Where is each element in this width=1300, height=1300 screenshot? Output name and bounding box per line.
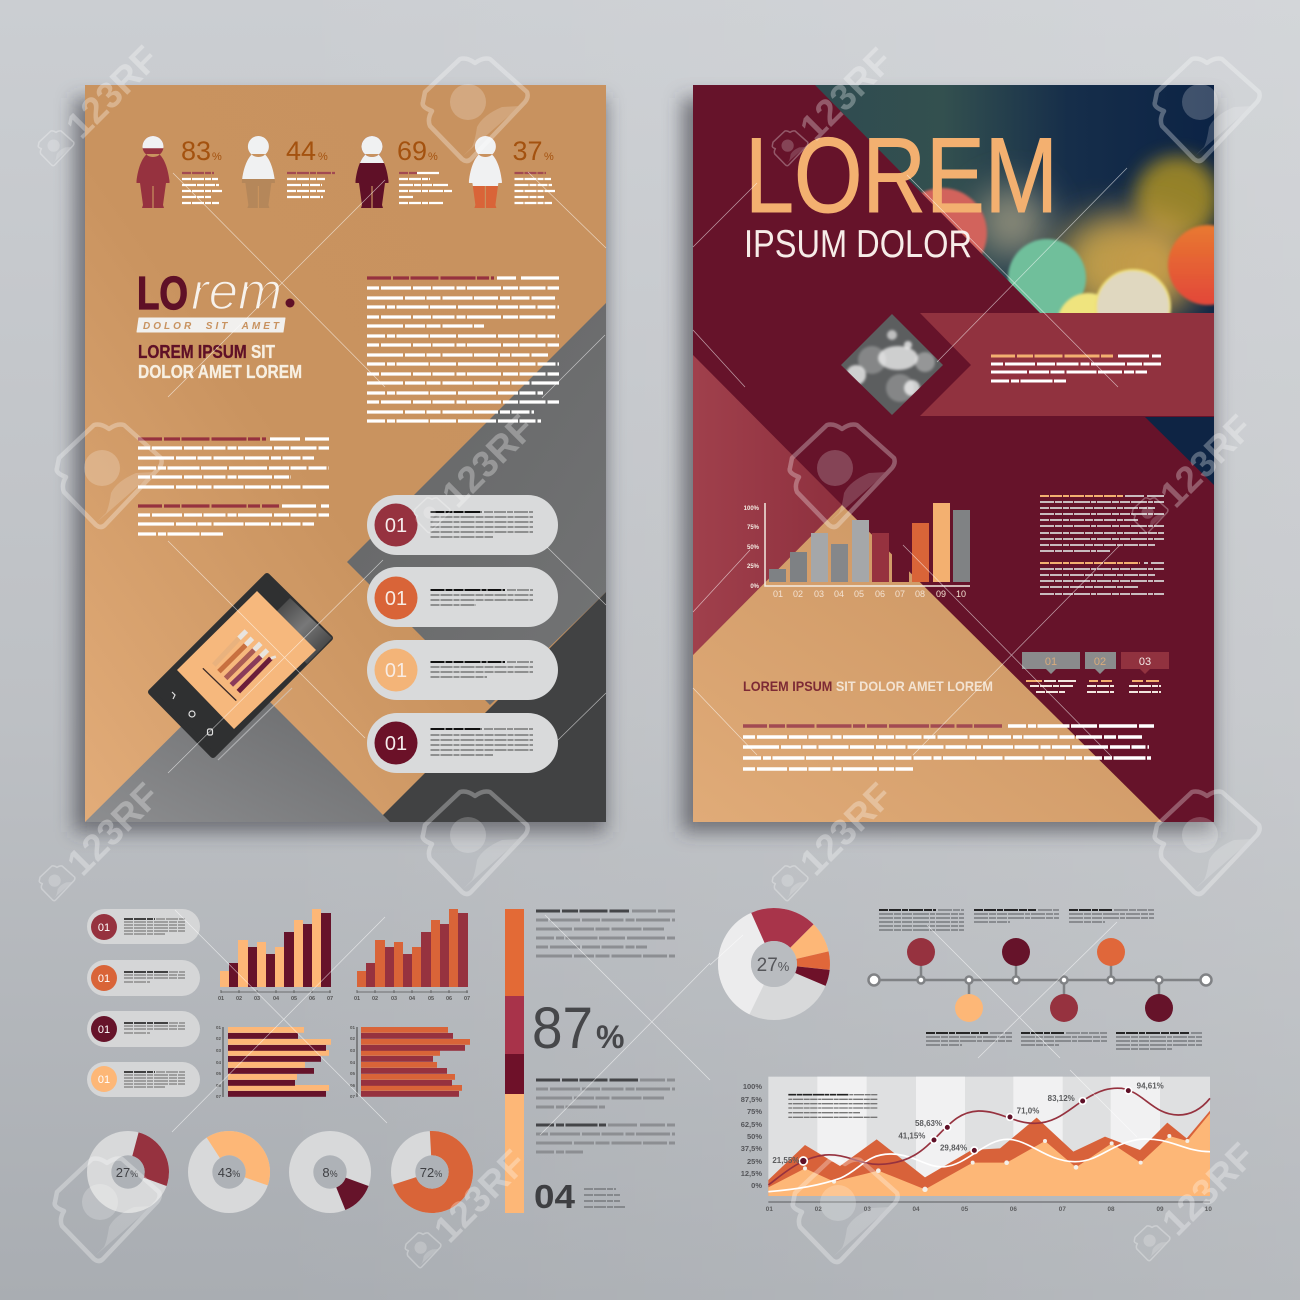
panel: right brochure	[693, 85, 1248, 822]
y axis labels: 37,5%	[741, 1144, 762, 1153]
axis labels: 02	[236, 996, 242, 1002]
text block: right column	[1040, 496, 1164, 594]
mini pill 1	[87, 909, 200, 944]
y axis labels: 75%	[747, 1107, 762, 1116]
data labels: 29,84%	[940, 1144, 967, 1153]
axis labels: 05	[216, 1071, 221, 1076]
donut 72%: 72%	[420, 1165, 442, 1180]
donut 43%	[188, 1131, 270, 1213]
text block: main column	[367, 278, 559, 421]
stat numbers: %	[212, 151, 222, 163]
people statistics row	[136, 136, 555, 208]
x axis: 09	[1156, 1206, 1164, 1213]
axis labels: 01	[354, 996, 360, 1002]
horizontal bar chart 1	[216, 1025, 331, 1099]
timeline captions top	[879, 910, 1154, 930]
grey diagonal band	[347, 303, 606, 705]
data labels: 21,55%	[772, 1156, 799, 1165]
axis labels: 05	[350, 1071, 355, 1076]
icon: person 44	[242, 136, 275, 208]
big pie 27%: 27%	[757, 955, 790, 976]
y axis labels: 75%	[747, 525, 760, 531]
axis labels: 01	[350, 1025, 355, 1030]
white dots	[803, 1134, 1189, 1192]
red line	[768, 1088, 1210, 1185]
orange area	[768, 1111, 1210, 1196]
logo: Lorem	[137, 263, 294, 332]
axis labels: 03	[216, 1048, 221, 1053]
column chart 1	[218, 909, 333, 1002]
subheading: lorem ipsum: LOREM IPSUM SIT DOLOR AMET LOREM	[743, 678, 993, 694]
stat numbers: 37	[512, 136, 543, 166]
tagline: DOLOR SIT AMET	[143, 321, 280, 332]
x axis labels: 10	[956, 589, 966, 599]
axis labels: 02	[372, 996, 378, 1002]
icon: person 37	[469, 136, 502, 208]
mini pill 3	[87, 1011, 200, 1047]
grey lower wedge	[85, 670, 390, 822]
data labels	[772, 1082, 1164, 1165]
y axis labels: 25%	[747, 1157, 762, 1166]
donut 8%: 8%	[322, 1165, 338, 1180]
x axis: 02	[815, 1206, 822, 1213]
tag 03	[1121, 652, 1169, 674]
y axis labels	[744, 506, 760, 590]
mini pill 1: 01	[98, 922, 110, 934]
list pill 4: 01	[385, 733, 407, 755]
y axis labels: 100%	[743, 1082, 762, 1091]
axis labels	[354, 996, 470, 1002]
logo: Lorem: rem	[191, 263, 282, 321]
x axis: 05	[961, 1206, 969, 1213]
mini pill 4: 01	[98, 1074, 110, 1086]
x axis labels: 03	[814, 589, 824, 599]
y axis labels	[741, 1082, 762, 1190]
list pill 2: 01	[385, 588, 407, 610]
x axis: 07	[1059, 1206, 1066, 1213]
mini pills	[87, 909, 200, 1097]
axis labels: 06	[309, 996, 315, 1002]
x axis labels: 04	[834, 589, 844, 599]
mini pill 4	[87, 1062, 200, 1097]
big number 04: 04	[534, 1178, 576, 1215]
ribbon band	[920, 313, 1214, 416]
y axis labels: 87,5%	[741, 1095, 762, 1104]
column chart 2	[354, 909, 470, 1002]
peach triangle	[693, 505, 1162, 822]
list pill 2	[367, 567, 558, 627]
axis labels: 07	[350, 1094, 355, 1099]
ribbon text	[991, 356, 1161, 381]
watermark stamps and text: 123RF	[792, 40, 900, 148]
x axis: 01	[766, 1206, 773, 1213]
donut 72%	[391, 1131, 473, 1213]
watermark stamps and text: 123RF	[59, 775, 167, 883]
axis labels: 06	[350, 1083, 355, 1088]
vertical stacked bar	[505, 909, 524, 1213]
navy corner triangle	[1145, 417, 1214, 485]
tag 02	[1085, 652, 1116, 674]
axis labels: 07	[464, 996, 470, 1002]
watermark stamps and text: 123RF	[58, 38, 166, 146]
axis labels: 02	[350, 1036, 355, 1041]
subheading: LOREM IPSUM SIT	[138, 342, 275, 362]
data labels: 41,15%	[898, 1131, 925, 1140]
x axis labels: 08	[915, 589, 925, 599]
big number 87%	[532, 996, 624, 1061]
data labels: 83,12%	[1048, 1094, 1075, 1103]
axis labels: 03	[391, 996, 397, 1002]
panel: left brochure	[85, 85, 606, 822]
mini pill 2: 01	[98, 973, 110, 985]
stat numbers	[181, 136, 554, 166]
y axis labels: 62,5%	[741, 1120, 762, 1129]
axis labels: 04	[273, 996, 280, 1002]
tag 03: 03	[1139, 656, 1151, 668]
axis labels: 07	[327, 996, 333, 1002]
axis labels: 06	[216, 1083, 221, 1088]
axis labels: 05	[291, 996, 297, 1002]
big number 87%: 87	[532, 996, 593, 1061]
x axis: 06	[1010, 1206, 1017, 1213]
axis labels: 04	[216, 1060, 221, 1065]
donut 27%	[87, 1131, 169, 1213]
x axis labels: 09	[936, 589, 946, 599]
watermark stamps and text: 123RF	[792, 775, 900, 883]
watermark stamps and text: 123RF	[1154, 1135, 1262, 1243]
chart stripes	[768, 1077, 1210, 1196]
axis labels: 06	[446, 996, 452, 1002]
axis labels: 04	[409, 996, 416, 1002]
stat numbers: 44	[286, 136, 316, 166]
subheading	[138, 342, 302, 382]
donut 27%: 27%	[116, 1165, 138, 1180]
x axis labels	[773, 589, 966, 599]
watermark diagonal lines	[168, 168, 1137, 1137]
peach area	[768, 1113, 1210, 1196]
axis labels: 03	[350, 1048, 355, 1053]
area line chart	[741, 1077, 1212, 1213]
donut 43%: 43%	[218, 1165, 240, 1180]
x axis: 04	[912, 1206, 920, 1213]
photo: grey diamond	[841, 314, 943, 416]
tag 01	[1022, 652, 1080, 674]
icon: person 69	[356, 136, 388, 208]
data labels: 71,0%	[1017, 1106, 1039, 1115]
subheading: IPSUM DOLOR: IPSUM DOLOR	[744, 223, 972, 266]
x axis	[766, 1202, 1212, 1213]
x axis: 08	[1107, 1206, 1115, 1213]
tag 01: 01	[1045, 656, 1057, 668]
timeline	[868, 910, 1212, 1049]
y axis labels: 0%	[751, 1181, 762, 1190]
y axis labels: 25%	[747, 564, 760, 570]
phone buttons	[172, 692, 212, 735]
x axis labels: 07	[895, 589, 905, 599]
tag 02: 02	[1094, 656, 1106, 668]
text block: top stats	[536, 911, 675, 956]
horizontal bar chart 2	[350, 1025, 470, 1099]
timeline captions bottom	[926, 1033, 1202, 1049]
logo: Lorem: LO	[137, 267, 188, 319]
stat numbers: %	[544, 151, 554, 163]
text block: bottom	[743, 726, 1154, 769]
y axis labels: 100%	[744, 506, 760, 512]
tag captions	[1026, 681, 1161, 692]
list pill 1: 01	[385, 515, 407, 537]
y axis labels: 50%	[747, 1132, 762, 1141]
big pie 27%	[718, 908, 830, 1020]
x axis: 10	[1205, 1206, 1212, 1213]
data labels: 58,63%	[915, 1119, 942, 1128]
stat numbers: 83	[181, 136, 211, 166]
phone screen chart	[203, 631, 276, 701]
axis labels: 05	[428, 996, 434, 1002]
axis labels: 04	[350, 1060, 355, 1065]
watermark stamps and text: 123RF	[1152, 407, 1260, 515]
text block: middle stats	[536, 1080, 675, 1152]
watermark stamps and text: 123RF	[426, 1142, 534, 1250]
phone screen	[177, 591, 316, 729]
text blocks: left column	[138, 439, 329, 534]
x axis labels: 01	[773, 589, 783, 599]
subheading: DOLOR AMET LOREM	[138, 362, 302, 382]
axis labels: 02	[216, 1036, 221, 1041]
axis labels: 01	[216, 1025, 221, 1030]
data labels: 94,61%	[1137, 1082, 1164, 1091]
stat numbers: %	[318, 151, 328, 163]
brochure shadows	[74, 98, 1214, 832]
red triangle	[693, 355, 842, 655]
white line	[768, 1139, 1210, 1192]
data markers	[799, 1087, 1132, 1165]
icon: person 83	[136, 136, 170, 208]
axis labels	[350, 1025, 355, 1099]
stat numbers: %	[428, 151, 438, 163]
x axis: 03	[864, 1206, 871, 1213]
icon: smartphone	[151, 576, 332, 760]
axis labels	[216, 1025, 221, 1099]
list pill 3: 01	[385, 660, 407, 682]
stat captions	[182, 173, 555, 203]
list pill 1	[367, 495, 558, 555]
04 caption	[584, 1189, 625, 1207]
chart caption	[788, 1095, 877, 1117]
axis labels: 01	[218, 996, 224, 1002]
dark grey corner	[376, 592, 606, 822]
donut 8%	[289, 1131, 371, 1213]
x axis labels: 05	[854, 589, 864, 599]
x axis labels: 02	[793, 589, 803, 599]
y axis labels: 0%	[750, 584, 760, 590]
big number 87%: %	[596, 1019, 624, 1055]
bar chart	[744, 503, 970, 599]
axis labels: 07	[216, 1094, 221, 1099]
list pill 4	[367, 713, 558, 773]
photo: bokeh lights	[815, 85, 1214, 313]
list pill 3	[367, 640, 558, 700]
x axis labels: 06	[875, 589, 885, 599]
axis labels	[218, 996, 333, 1002]
axis labels: 03	[254, 996, 260, 1002]
y axis labels: 50%	[747, 545, 760, 551]
mini pill 2	[87, 960, 200, 996]
y axis labels: 12,5%	[741, 1169, 762, 1178]
watermark stamps and text: 123RF	[434, 407, 542, 515]
heading: LOREM: LOREM	[745, 115, 1058, 235]
stat numbers: 69	[397, 136, 427, 166]
mini pill 3: 01	[98, 1024, 110, 1036]
